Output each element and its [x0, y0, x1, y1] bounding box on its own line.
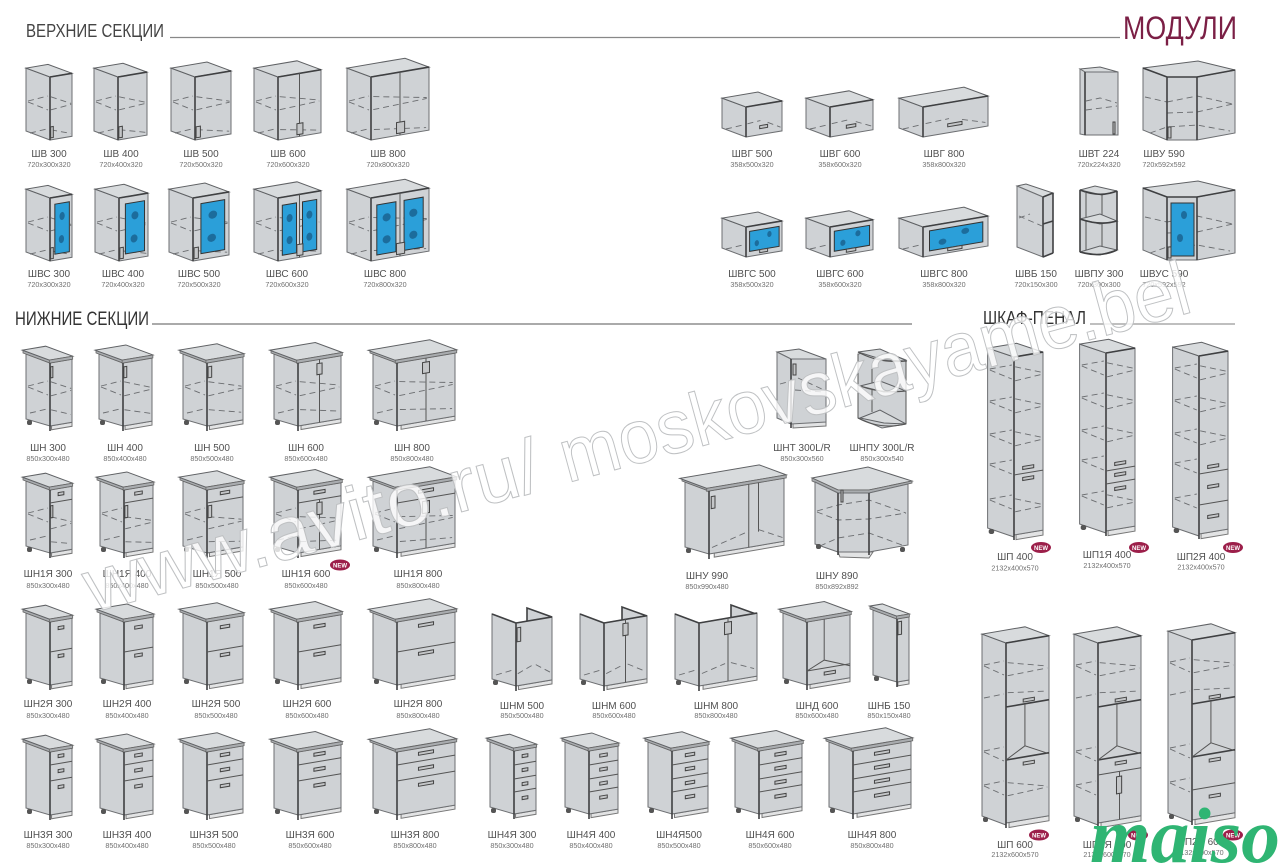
cabinet: ШН 300 [22, 346, 73, 463]
cabinet: ШН3Я 500 [179, 733, 244, 850]
cabinet: ШН4Я 300 [486, 734, 537, 850]
cabinet: ШП1Я 600 [1074, 627, 1141, 859]
cabinet: ШВС 800: 720x800x320 [363, 280, 407, 289]
cabinet: ШВУ 590: ШВУ 590 [1143, 149, 1185, 160]
badge: new: NEW [1131, 834, 1145, 840]
cabinet: ШН1Я 400: 850x400x480 [105, 581, 149, 590]
cabinet: ШН1Я 500: 850x500x480 [195, 581, 239, 590]
cabinet: ШВС 600 [254, 182, 321, 289]
watermark [73, 246, 1199, 630]
cabinet: ШВ 500: ШВ 500 [183, 149, 219, 160]
cabinet: ШВС 600: 720x600x320 [265, 280, 309, 289]
cabinet: ШВБ 150 [1014, 184, 1058, 289]
cabinet: ШН3Я 500: ШН3Я 500 [190, 830, 239, 841]
cabinet: ШВС 400 [95, 184, 148, 289]
cabinet: ШНД 600: 850x600x480 [795, 711, 839, 720]
cabinet: ШНМ 600: ШНМ 600 [592, 701, 637, 712]
cabinet: ШВ 400: ШВ 400 [103, 149, 139, 160]
cabinet: ШН4Я 500: 850x500x480 [657, 841, 701, 850]
cabinet: ШН4Я 600: ШН4Я 600 [746, 830, 795, 841]
cabinet: ШН4Я 400 [561, 733, 619, 850]
cabinet: ШВС 400: ШВС 400 [102, 269, 145, 280]
cabinet: ШНМ 600: 850x600x480 [592, 711, 636, 720]
cabinet: ШН4Я 300: ШН4Я 300 [488, 830, 537, 841]
cabinet: ШВГ 600: ШВГ 600 [820, 149, 861, 160]
cabinet: ШН4Я 800 [824, 728, 913, 850]
cabinet: ШП 600: 2132x600x570 [991, 850, 1039, 859]
cabinet: ШНМ 800: ШНМ 800 [694, 701, 739, 712]
cabinet: ШВ 400 [94, 63, 147, 169]
cabinet: ШП2Я 400: 2132x400x570 [1177, 562, 1225, 572]
cabinet: ШВС 400: 720x400x320 [101, 280, 145, 289]
cabinet: ШН2Я 600: ШН2Я 600 [283, 699, 332, 710]
cabinet: ШН 300: 850x300x480 [26, 454, 70, 463]
cabinet: ШНМ 800: 850x800x480 [694, 711, 738, 720]
cabinet: ШН1Я 600: ШН1Я 600 [282, 569, 331, 580]
cabinet: ШНТ 300L/R: 850x300x560 [780, 454, 824, 463]
cabinet: ШН 800 [368, 340, 457, 463]
cabinet: ШНУ 990 [680, 465, 786, 591]
cabinet: ШП 400 [988, 343, 1043, 572]
cabinet: ШВТ 224: 720x224x320 [1077, 160, 1121, 169]
cabinet: ШН2Я 400 [96, 604, 154, 720]
cabinet: ШН1Я 300: ШН1Я 300 [24, 569, 73, 580]
cabinet: ШН3Я 400 [96, 734, 154, 850]
cabinet: ШН3Я 400: 850x400x480 [105, 841, 149, 850]
cabinet: ШВ 800: ШВ 800 [370, 149, 406, 160]
cabinet: ШВУС 590: ШВУС 590 [1140, 269, 1189, 280]
cabinet: ШП1Я 400: ШП1Я 400 [1083, 550, 1132, 561]
cabinet: ШН 600 [270, 342, 342, 463]
cabinet: ШН 500: 850x500x480 [190, 454, 234, 463]
cabinet: ШН2Я 400: 850x400x480 [105, 711, 149, 720]
cabinet: ШНМ 500: ШНМ 500 [500, 701, 545, 712]
cabinet: ШН2Я 500: 850x500x480 [194, 711, 238, 720]
cabinet: ШВ 300 [26, 64, 72, 169]
cabinet: ШП 400: ШП 400 [997, 552, 1033, 563]
cabinet: ШНУ 990: 850x990x480 [685, 582, 729, 591]
cabinet: ШН2Я 600 [270, 601, 342, 720]
cabinet: ШВ 800 [347, 58, 429, 169]
cabinet: ШН4Я 600: 850x600x480 [748, 841, 792, 850]
cabinet: ШВГС 600: 358x600x320 [818, 280, 862, 289]
panel: upper sections [26, 10, 1237, 289]
cabinet: ШВ 800: 720x800x320 [366, 160, 410, 169]
cabinet: ШВС 300 [26, 185, 72, 289]
cabinet: ШН1Я 500: ШН1Я 500 [193, 569, 242, 580]
cabinet: ШН2Я 300: ШН2Я 300 [24, 699, 73, 710]
cabinet: ШП1Я 400 [1080, 339, 1135, 570]
cabinet: ШН2Я 300: 850x300x480 [26, 711, 70, 720]
badge: new: NEW [1132, 546, 1146, 552]
cabinet: ШНД 600: ШНД 600 [796, 701, 839, 712]
cabinet: ШВГС 500: ШВГС 500 [728, 269, 776, 280]
cabinet: ШВУС 590 [1140, 181, 1235, 289]
cabinet: ШН4Я 500: ШН4Я500 [656, 830, 702, 841]
cabinet: ШН 500: ШН 500 [194, 443, 230, 454]
cabinet: ШН3Я 600: 850x600x480 [288, 841, 332, 850]
cabinet: ШН4Я 600 [731, 730, 803, 850]
cabinet: ШВПУ 300 [1075, 186, 1124, 289]
cabinet: ШН4Я 300: 850x300x480 [490, 841, 534, 850]
cabinet: ШВГ 500 [722, 92, 782, 169]
cabinet: ШН4Я 800: ШН4Я 800 [848, 830, 897, 841]
heading: lower sections: НИЖНИЕ СЕКЦИИ [15, 309, 149, 330]
heading: tall cabinets: ШКАФ-ПЕНАЛ [983, 308, 1086, 328]
cabinet: ШВ 500 [171, 62, 231, 169]
cabinet: ШН2Я 300 [22, 605, 73, 720]
cabinet: ШВС 500: 720x500x320 [177, 280, 221, 289]
cabinet: ШН3Я 300: 850x300x480 [26, 841, 70, 850]
badge: new [1223, 830, 1243, 840]
cabinet: ШВГ 500: ШВГ 500 [732, 149, 773, 160]
cabinet: ШВГС 600: ШВГС 600 [816, 269, 864, 280]
title: modules: МОДУЛИ [1123, 10, 1237, 46]
cabinet: ШН2Я 500: ШН2Я 500 [192, 699, 241, 710]
cabinet: ШВ 600: ШВ 600 [270, 149, 306, 160]
cabinet: ШН1Я 800: 850x800x480 [396, 581, 440, 590]
badge: new: NEW [1032, 834, 1046, 840]
cabinet: ШНД 600 [779, 601, 851, 720]
cabinet: ШВГС 600 [806, 211, 873, 289]
panel: tall cabinets [982, 308, 1243, 859]
cabinet: ШНМ 500 [492, 608, 552, 720]
cabinet: ШН3Я 300 [22, 735, 73, 850]
cabinet: ШНТ 300L/R [773, 349, 831, 463]
cabinet: ШН3Я 800: 850x800x480 [393, 841, 437, 850]
cabinet: ШН3Я 600 [270, 731, 342, 850]
cabinet: ШН3Я 800: ШН3Я 800 [391, 830, 440, 841]
cabinet: ШН2Я 500 [179, 603, 244, 720]
cabinet: ШП 400: 2132x400x570 [991, 564, 1039, 572]
cabinet: ШП2Я 400 [1173, 342, 1228, 572]
cabinet: ШНБ 150: 850x150x480 [867, 711, 911, 720]
cabinet: ШВПУ 300: 720x300x300 [1077, 280, 1121, 289]
cabinet: ШП1Я 400: 2132x400x570 [1083, 561, 1131, 570]
cabinet: ШН1Я 600 [270, 469, 342, 590]
cabinet: ШВГ 800: 358x800x320 [922, 160, 966, 169]
cabinet: ШП 600: ШП 600 [997, 840, 1033, 851]
cabinet: ШН3Я 400: ШН3Я 400 [103, 830, 152, 841]
cabinet: ШВГС 800 [899, 207, 988, 289]
cabinet: ШВТ 224: ШВТ 224 [1079, 149, 1120, 160]
cabinet: ШВГ 800 [899, 87, 988, 169]
badge: new: NEW [1226, 834, 1240, 840]
cabinet: ШН 600: 850x600x480 [284, 454, 328, 463]
cabinet: ШН1Я 400: ШН1Я 400 [103, 569, 152, 580]
cabinet: ШН3Я 300: ШН3Я 300 [24, 830, 73, 841]
cabinet: ШВ 500: 720x500x320 [179, 160, 223, 169]
cabinet: ШП1Я 600: 2132x600x570 [1083, 850, 1131, 859]
cabinet: ШВ 600 [254, 61, 321, 169]
cabinet: ШН1Я 500 [179, 471, 244, 590]
badge: new: NEW [333, 564, 347, 570]
cabinet: ШВБ 150: ШВБ 150 [1015, 269, 1057, 280]
cabinet: ШВС 500: ШВС 500 [178, 269, 221, 280]
cabinet: ШН1Я 800 [368, 467, 457, 590]
cabinet: ШН4Я 400: 850x400x480 [569, 841, 613, 850]
cabinet: ШП 600 [982, 627, 1049, 859]
cabinet: ШН3Я 600: ШН3Я 600 [286, 830, 335, 841]
cabinet: ШВТ 224 [1077, 67, 1121, 169]
cabinet: ШП1Я 600: ШП1Я 600 [1083, 840, 1132, 851]
panel: lower sections [15, 309, 914, 850]
cabinet: ШВУ 590: 720x592x592 [1142, 160, 1186, 169]
cabinet: ШВГ 500: 358x500x320 [730, 160, 774, 169]
cabinet: ШВУС 590: 720x592x592 [1142, 280, 1186, 289]
badge: new [1128, 830, 1148, 840]
cabinet: ШВУ 590 [1142, 61, 1235, 169]
cabinet: ШН2Я 800: ШН2Я 800 [394, 699, 443, 710]
cabinet: ШН1Я 800: ШН1Я 800 [394, 569, 443, 580]
cabinet: ШН1Я 300: 850x300x480 [26, 581, 70, 590]
cabinet: ШНПУ 300L/R [850, 349, 914, 463]
cabinet: ШН 500 [179, 344, 244, 463]
cabinet: ШП2Я 600 [1168, 624, 1235, 857]
watermark: www.avito.ru/ [73, 423, 551, 630]
cabinet: ШВ 300: 720x300x320 [27, 160, 71, 169]
cabinet: ШВГ 600 [806, 91, 873, 169]
cabinet: ШВБ 150: 720x150x300 [1014, 280, 1058, 289]
badge: new [1031, 542, 1051, 553]
cabinet: ШН 800: 850x800x480 [390, 454, 434, 463]
cabinet: ШН4Я 500 [644, 732, 709, 850]
cabinet: ШН 400 [95, 345, 153, 463]
cabinet: ШНУ 890 [812, 467, 912, 591]
heading: upper sections: ВЕРХНИЕ СЕКЦИИ [26, 21, 164, 41]
badge: new [1223, 542, 1243, 553]
cabinet: ШВС 300: ШВС 300 [28, 269, 71, 280]
cabinet: ШНУ 990: ШНУ 990 [686, 571, 729, 582]
cabinet: ШНМ 500: 850x500x480 [500, 711, 544, 720]
cabinet: ШН4Я 400: ШН4Я 400 [567, 830, 616, 841]
cabinet: ШВГС 800: ШВГС 800 [920, 269, 968, 280]
cabinet: ШН 800: ШН 800 [394, 443, 430, 454]
cabinet: ШН2Я 400: ШН2Я 400 [103, 699, 152, 710]
cabinet: ШНУ 890: ШНУ 890 [816, 571, 859, 582]
cabinet: ШП2Я 600: ШП2Я 600 [1176, 837, 1225, 848]
cabinet: ШВ 600: 720x600x320 [266, 160, 310, 169]
cabinet: ШП2Я 600: 2132x600x570 [1176, 848, 1224, 857]
cabinet: ШН1Я 300 [22, 473, 73, 590]
cabinet: ШНПУ 300L/R: ШНПУ 300L/R [850, 443, 914, 454]
cabinet: ШНБ 150 [867, 604, 911, 720]
cabinet: ШНУ 890: 850x892x892 [815, 582, 859, 591]
cabinet: ШН2Я 800: 850x800x480 [396, 711, 440, 720]
watermark: moskovskayame.bel [550, 246, 1199, 499]
cabinet: ШНМ 600 [580, 607, 647, 720]
cabinet: ШНТ 300L/R: ШНТ 300L/R [773, 443, 831, 454]
cabinet: ШН 600: ШН 600 [288, 443, 324, 454]
cabinet: ШВГ 600: 358x600x320 [818, 160, 862, 169]
cabinet: ШВС 800: ШВС 800 [364, 269, 407, 280]
cabinet: ШВГС 800: 358x800x320 [922, 280, 966, 289]
badge: new [1129, 542, 1149, 553]
cabinet: ШНБ 150: ШНБ 150 [868, 701, 911, 712]
cabinet: ШВС 800 [347, 179, 429, 289]
cabinet: ШНПУ 300L/R: 850x300x540 [860, 454, 904, 463]
cabinet: ШВС 300: 720x300x320 [27, 280, 71, 289]
cabinet: ШВГС 500 [722, 212, 782, 289]
cabinet: ШН2Я 600: 850x600x480 [285, 711, 329, 720]
cabinet: ШНМ 800 [675, 605, 757, 720]
cabinet: ШН1Я 400 [96, 472, 154, 590]
cabinet: ШН 400: ШН 400 [107, 443, 143, 454]
cabinet: ШП2Я 400: ШП2Я 400 [1177, 552, 1226, 563]
badge: new [330, 560, 350, 570]
cabinet: ШН2Я 800 [368, 599, 457, 720]
cabinet: ШВГС 500: 358x500x320 [730, 280, 774, 289]
badge: new: NEW [1034, 546, 1048, 552]
cabinet: ШН4Я 800: 850x800x480 [850, 841, 894, 850]
badge: new: NEW [1226, 546, 1240, 552]
cabinet: ШВ 300: ШВ 300 [31, 149, 67, 160]
cabinet: ШН1Я 600: 850x600x480 [284, 581, 328, 590]
cabinet: ШВС 500 [169, 183, 229, 289]
cabinet: ШН3Я 800 [368, 729, 457, 850]
cabinet: ШН 300: ШН 300 [30, 443, 66, 454]
cabinet: ШВПУ 300: ШВПУ 300 [1075, 269, 1124, 280]
cabinet: ШВС 600: ШВС 600 [266, 269, 309, 280]
cabinet: ШВГ 800: ШВГ 800 [924, 149, 965, 160]
cabinet: ШН3Я 500: 850x500x480 [192, 841, 236, 850]
badge: new [1029, 830, 1049, 840]
cabinet: ШВ 400: 720x400x320 [99, 160, 143, 169]
cabinet: ШН 400: 850x400x480 [103, 454, 147, 463]
